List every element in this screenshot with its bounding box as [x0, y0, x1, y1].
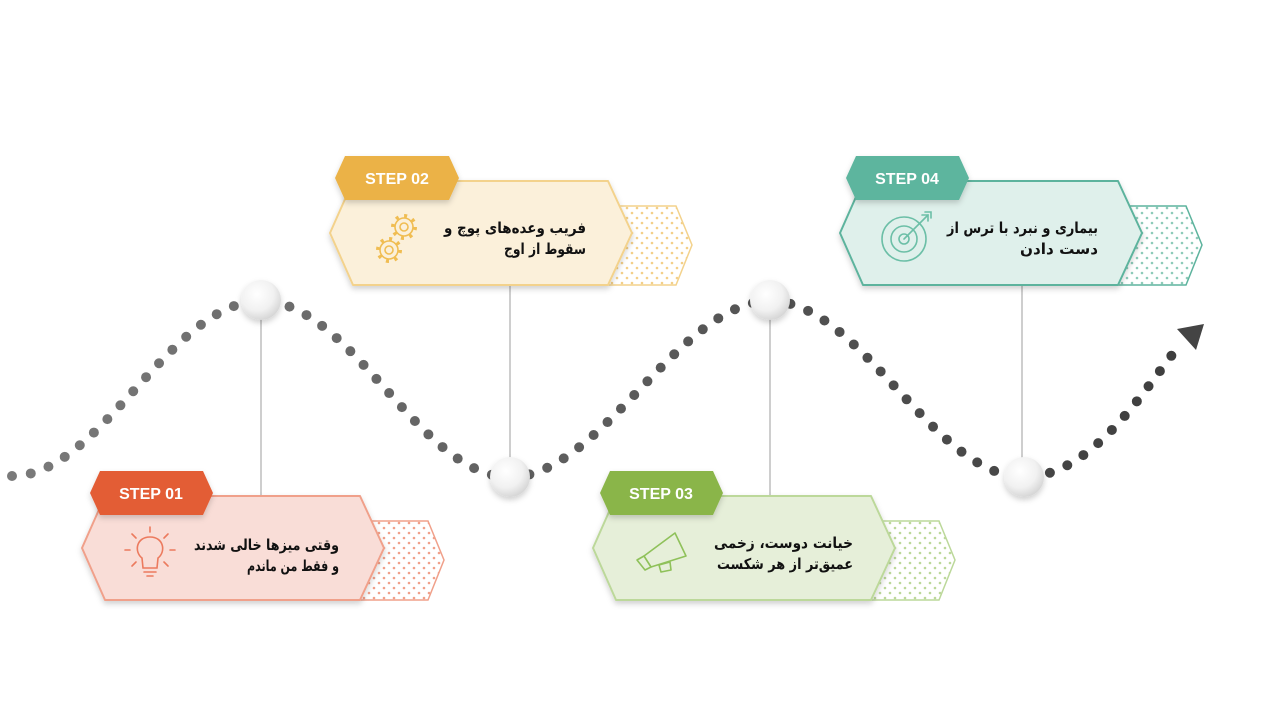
arrow head	[1177, 324, 1204, 350]
card: step 04	[840, 156, 1202, 285]
card: step 02	[330, 156, 692, 285]
card: step 01	[82, 471, 444, 600]
text block: بیماری و نبرد با ترس از	[946, 219, 1098, 237]
tag: STEP 02: STEP 02	[365, 171, 429, 188]
icon: target	[882, 212, 931, 261]
text block: و فقط من ماندم	[247, 557, 339, 575]
text block	[946, 219, 1098, 258]
text block	[443, 219, 586, 258]
text block: دست دادن	[1020, 240, 1098, 258]
tag: STEP 03: STEP 03	[629, 486, 693, 503]
tag: STEP 01: STEP 01	[119, 486, 183, 503]
connector lines	[261, 285, 1022, 496]
text block	[194, 536, 339, 575]
card: step 03	[593, 471, 955, 600]
node circles	[241, 280, 1044, 497]
tag: STEP 02	[335, 156, 459, 200]
icon: gears	[378, 216, 415, 261]
text block	[714, 534, 853, 573]
text block: وقتی میزها خالی شدند	[194, 536, 339, 554]
text block: خیانت دوست، زخمی	[714, 534, 853, 552]
text block: سقوط از اوج	[504, 240, 586, 258]
tag: STEP 04: STEP 04	[875, 171, 939, 188]
text block: عمیق‌تر از هر شکست	[717, 555, 853, 573]
tag: STEP 04	[846, 156, 969, 200]
icon: lightbulb	[125, 527, 175, 576]
tag: STEP 01	[90, 471, 213, 515]
tag: STEP 03	[600, 471, 723, 515]
text block: فریب وعده‌های پوچ و	[443, 219, 586, 238]
icon: megaphone	[637, 533, 686, 572]
dotted wave path	[12, 301, 1204, 477]
